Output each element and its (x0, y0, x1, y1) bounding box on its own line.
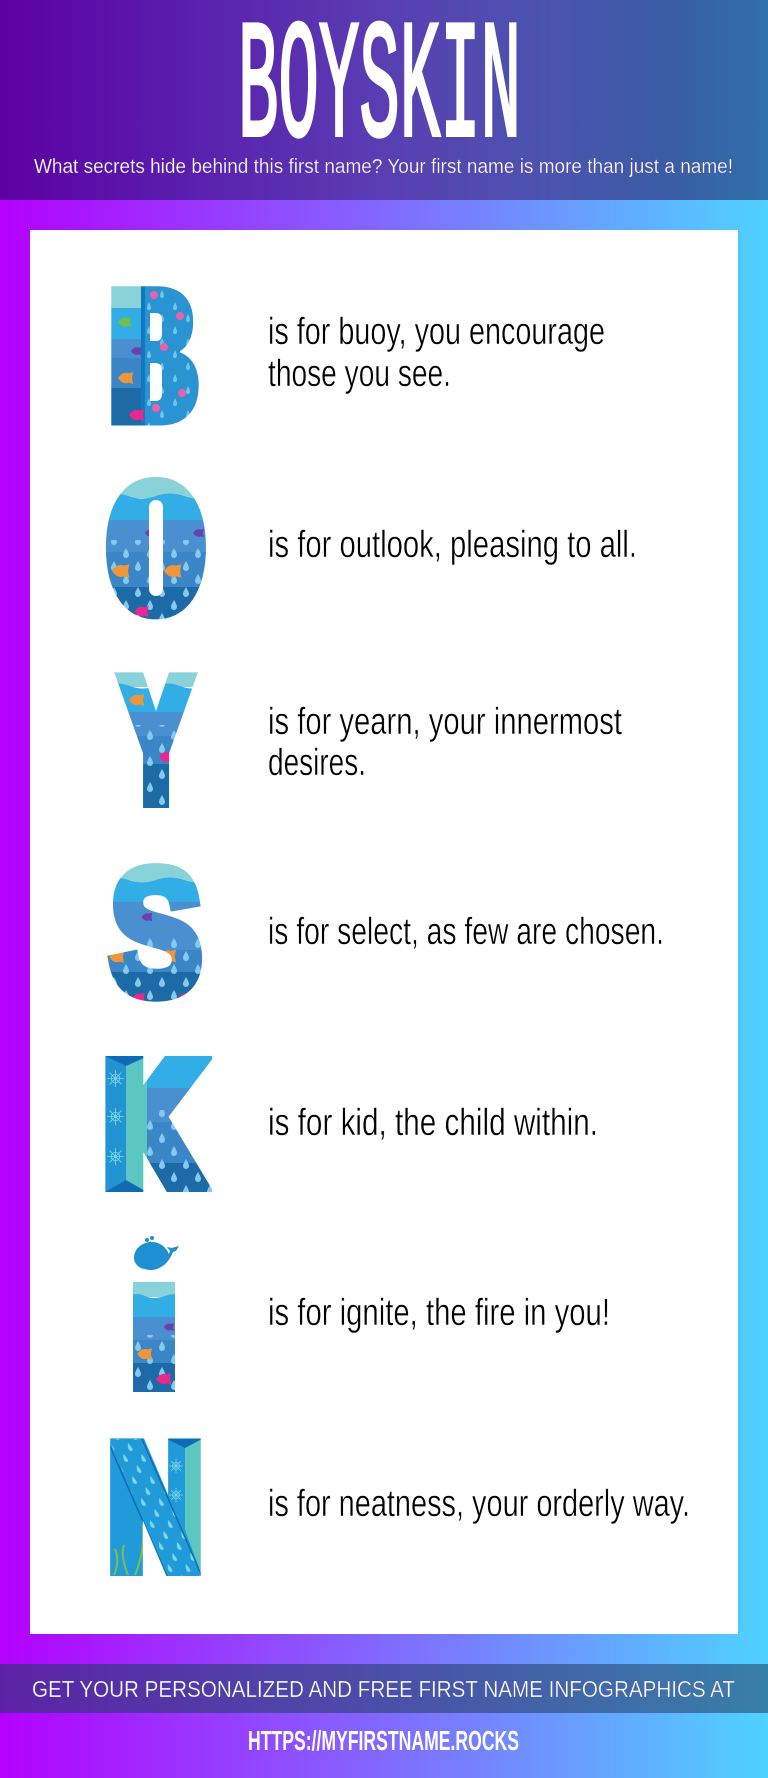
letter I caption: is for ignite, the fire in you! (268, 1292, 610, 1334)
letter Y caption line 2: desires. (268, 742, 366, 784)
subtitle: What secrets hide behind this first name? Your first name is more than just a name! (34, 156, 733, 178)
letter Y (114, 672, 198, 808)
letter Y caption: is for yearn, your innermost (268, 701, 622, 743)
icon: whale (134, 1236, 179, 1272)
letter O caption: is for outlook, pleasing to all. (268, 524, 637, 566)
letter B (111, 286, 199, 426)
letter I (133, 1282, 175, 1392)
footer url: HTTPS://MYFIRSTNAME.ROCKS (248, 1725, 519, 1756)
white content panel (30, 230, 738, 1634)
letter S (107, 863, 202, 1002)
header band (0, 0, 768, 200)
letter K (105, 1056, 212, 1192)
letter B caption line 2: those you see. (268, 353, 451, 395)
footer band (0, 1664, 768, 1713)
letter K caption: is for kid, the child within. (268, 1102, 598, 1144)
letter O (106, 477, 206, 620)
letter B caption: is for buoy, you encourage (268, 311, 605, 353)
letter N (110, 1438, 201, 1576)
